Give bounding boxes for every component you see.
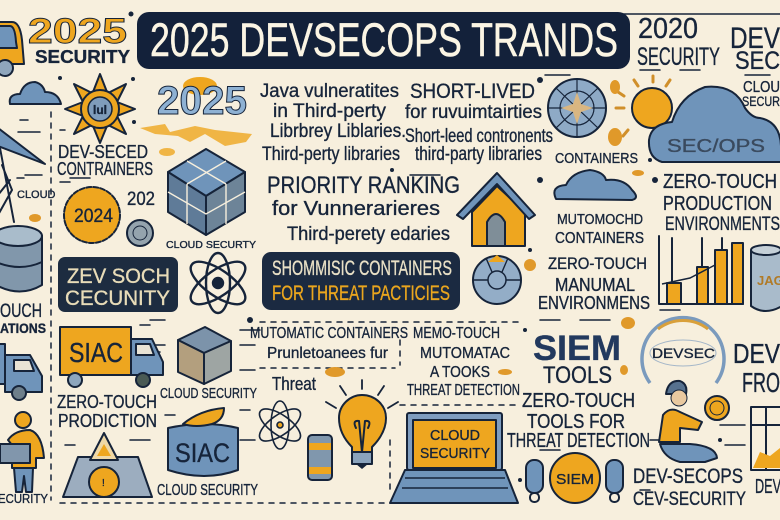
left callout: zev soch security: CECUNITY bbox=[65, 287, 170, 310]
icon: medium cloud bbox=[554, 170, 636, 200]
text block: automatic containers: MUTOMATIC CONTAINERS bbox=[250, 325, 408, 342]
heading: dev-seced containers: DEV-SECED bbox=[58, 142, 148, 162]
icon: atom bbox=[184, 253, 252, 313]
icon: house bbox=[457, 173, 535, 246]
label: containers multi: CONTAINERS bbox=[555, 230, 644, 247]
heading: 2020 security: 2020 bbox=[638, 13, 698, 45]
icon: padlock left bbox=[526, 460, 543, 502]
label: cloud security cropped bbox=[742, 79, 780, 109]
heading: zero-touch production bbox=[663, 171, 780, 235]
text block: memo-touch tools: MUTOMATAC bbox=[420, 345, 510, 362]
icon: siac box bbox=[168, 408, 238, 476]
heading: zero-touch manual environments bbox=[538, 254, 650, 313]
heading: siem tools: SIEM bbox=[533, 329, 621, 368]
heading: dev-secops: CEV-SECURITY bbox=[633, 489, 746, 510]
heading: zero-touch prodiction bbox=[57, 392, 157, 431]
label: containers multi bbox=[555, 211, 644, 247]
heading: siem tools: TOOLS bbox=[543, 362, 612, 389]
icon: sun: lul bbox=[93, 103, 107, 117]
heading: dev-seced containers bbox=[57, 142, 153, 179]
text block: short-lived: for ruvuimtairties bbox=[405, 102, 542, 123]
badge: siem bbox=[550, 453, 600, 503]
icon: person with box bbox=[0, 412, 44, 492]
icon: siac box: SIAC bbox=[175, 438, 230, 468]
title banner: 2025 DEVSECOPS TRANDS bbox=[150, 13, 618, 66]
heading: zero-touch tools bbox=[507, 390, 650, 452]
label: cloud security small: CLOUD SECURTY bbox=[166, 240, 256, 251]
heading: 2020 security bbox=[637, 13, 720, 71]
callout: containers for threat practices bbox=[262, 252, 460, 310]
icon: sun behind cloud bbox=[608, 76, 672, 146]
heading: dev fro cropped bbox=[733, 338, 780, 398]
text block: automatic containers: Prunletoanees fur bbox=[267, 345, 389, 362]
icon: truck siac: SIAC bbox=[69, 337, 123, 368]
label: cloud security 1: CLOUD SECURITY bbox=[160, 385, 257, 402]
icon: small cloud bbox=[10, 82, 61, 104]
heading: zero-touch prodiction: ZERO-TOUCH bbox=[57, 392, 157, 412]
text block: short-lived: Short-leed contronents bbox=[405, 126, 553, 147]
icon: barrel right bbox=[751, 245, 780, 311]
heading: 2025 gradient: 2025 bbox=[157, 79, 247, 123]
badge: 2024: 2024 bbox=[74, 206, 113, 227]
icon: wind turbine tower bbox=[0, 128, 45, 222]
heading: zero-touch tools: THREAT DETECTION bbox=[507, 430, 650, 452]
icon: big cloud devsecops: SEC/OPS bbox=[667, 136, 765, 156]
chart cropped right bbox=[751, 407, 780, 470]
left callout: zev soch security bbox=[58, 257, 178, 312]
icon: cube bbox=[168, 149, 245, 235]
text block: java vulnerabilities: Third-perty libraries bbox=[262, 144, 400, 165]
heading: 2025 security: 2025 bbox=[28, 12, 127, 51]
icon: barrel left bbox=[0, 226, 42, 292]
text block: memo-touch tools: THREAT DETECTION bbox=[407, 382, 520, 399]
heading: zero-touch tools: ZERO-TOUCH bbox=[522, 390, 635, 412]
heading: 2025 gradient bbox=[140, 77, 252, 156]
icon: padlock right bbox=[606, 460, 623, 502]
label: 202 bbox=[127, 189, 155, 246]
icon: small atom bbox=[255, 401, 305, 449]
icon: laptop cloud security: CLOUD bbox=[430, 427, 480, 444]
text block: memo-touch tools: A TOOKS bbox=[430, 364, 490, 381]
icon: canister bbox=[308, 435, 332, 480]
text block: java vulnerabilities: Java vulneratites bbox=[260, 81, 399, 102]
text block: java vulnerabilities: Librbrey Liblaries. bbox=[270, 121, 406, 142]
heading: siem tools bbox=[533, 329, 621, 389]
icon: big cloud devsecops bbox=[649, 87, 780, 162]
icon: triangle and coin machine bbox=[63, 433, 152, 497]
icon: truck siac bbox=[60, 327, 163, 387]
label: touch ations bbox=[0, 301, 46, 336]
heading: priority ranking bbox=[267, 172, 460, 245]
text block: short-lived: SHORT-LIVED bbox=[410, 80, 535, 103]
orange accent marks bbox=[29, 170, 644, 377]
decorative marks bbox=[58, 12, 722, 482]
heading: dev-seced containers: CONTRAINERS bbox=[57, 159, 153, 179]
callout: containers for threat practices: SHOMMISIC CONTAINERS bbox=[272, 257, 452, 280]
icon: laptop cloud security bbox=[390, 413, 518, 503]
icon: truck top left bbox=[0, 22, 24, 76]
text block: short-lived: third-party libraries bbox=[415, 144, 542, 165]
badge: devsec ring bbox=[642, 318, 724, 383]
icon: sitting person bbox=[659, 381, 729, 462]
text block: short-lived bbox=[405, 80, 553, 165]
heading: dev-secops bbox=[633, 465, 746, 510]
heading: priority ranking: Third-perety edaries bbox=[287, 224, 450, 245]
heading: 2025 security: SECURITY bbox=[35, 47, 130, 67]
text block: automatic containers bbox=[250, 325, 408, 362]
text block: java vulnerabilities: in Third-perty bbox=[273, 101, 386, 122]
badge: 2024 bbox=[64, 187, 120, 243]
heading: priority ranking: for Vunnerarieres bbox=[272, 198, 440, 220]
heading: zero-touch manual environments: ZERO-TOUCH bbox=[548, 254, 647, 273]
label: touch ations: ATIONS bbox=[0, 320, 46, 336]
heading: dev-secops: DEV-SECOPS bbox=[633, 465, 743, 488]
badge: siem: SIEM bbox=[556, 471, 594, 488]
heading: 2025 security bbox=[28, 12, 130, 67]
heading: dev sec cropped bbox=[730, 22, 780, 75]
heading: 2020 security: SECURITY bbox=[637, 43, 720, 71]
icon: sun bbox=[65, 74, 135, 143]
icon: laptop cloud security: SECURITY bbox=[420, 445, 490, 462]
label: cloud security 2: CLOUD SECURITY bbox=[157, 482, 258, 499]
label: containers multi: MUTOMOCHD bbox=[557, 211, 643, 228]
icon: globe bbox=[473, 255, 521, 304]
heading: zero-touch tools: TOOLS FOR bbox=[527, 411, 625, 433]
badge: devsec ring: DEVSEC bbox=[652, 345, 715, 361]
icon: compass wheel bbox=[548, 79, 606, 137]
text block: memo-touch tools: MEMO-TOUCH bbox=[413, 325, 500, 342]
icon: truck left bbox=[0, 344, 42, 400]
left callout: zev soch security: ZEV SOCH bbox=[67, 265, 170, 288]
label: 202: 202 bbox=[127, 189, 155, 210]
text block: memo-touch tools bbox=[407, 325, 520, 399]
text block: java vulnerabilities bbox=[260, 81, 406, 165]
heading: zero-touch prodiction: PRODICTION bbox=[58, 411, 157, 431]
bar chart bbox=[659, 236, 743, 304]
heading: zero-touch manual environments: MANUMAL bbox=[555, 275, 635, 295]
label: touch ations: OUCH bbox=[0, 301, 42, 322]
heading: zero-touch manual environments: ENVIRONMENS bbox=[538, 293, 650, 313]
callout: containers for threat practices: FOR THREAT PACTICIES bbox=[272, 282, 450, 305]
icon: triangle and coin machine: ! bbox=[102, 478, 105, 489]
heading: priority ranking: PRIORITY RANKING bbox=[267, 172, 460, 199]
icon: light bulb bbox=[326, 380, 398, 469]
label: threat: Threat bbox=[272, 374, 316, 394]
label: containers: CONTAINERS bbox=[555, 150, 638, 167]
icon: cardboard box bbox=[178, 327, 231, 384]
label: cloud: CLOUD bbox=[17, 189, 56, 201]
